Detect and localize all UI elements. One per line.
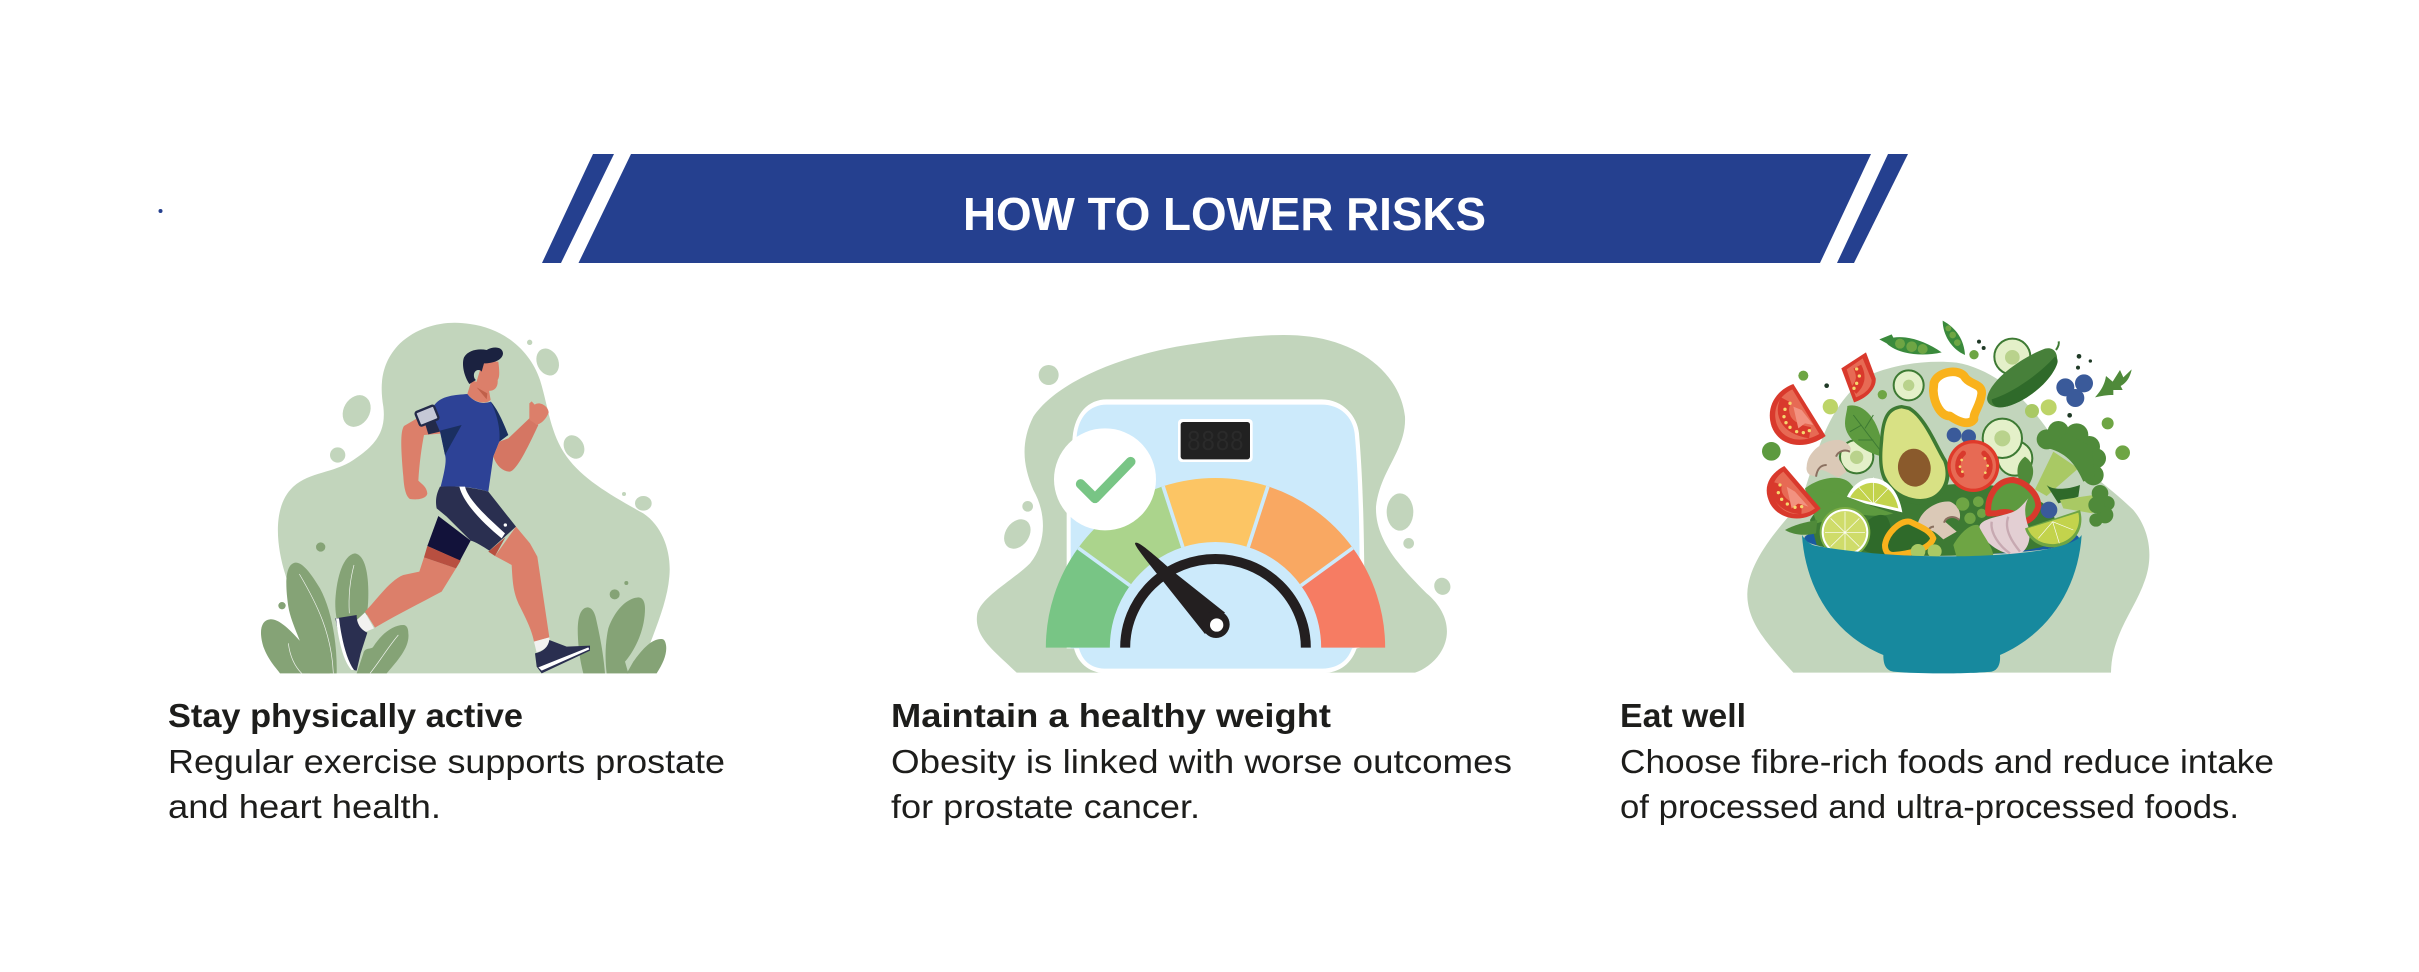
pea pods — [1879, 321, 1965, 355]
text block: stay physically active: and heart health. — [168, 788, 441, 825]
dark leaf — [1855, 515, 1891, 557]
cucumber slices — [1894, 370, 2022, 458]
scale body — [1071, 405, 1360, 669]
left plant — [261, 542, 408, 673]
front cuff — [488, 537, 505, 556]
text block: maintain a healthy weight: Maintain a healthy weight — [891, 697, 1331, 734]
lime half top — [1846, 477, 1902, 512]
gauge segments — [1046, 478, 1385, 648]
shorts — [436, 486, 516, 551]
text block: maintain a healthy weight: Obesity is linked with worse outcomes — [891, 743, 1512, 780]
back lettuce — [1785, 478, 1870, 535]
phone — [415, 405, 439, 426]
face — [476, 362, 499, 391]
fist — [529, 401, 549, 425]
red pepper ring — [1988, 480, 2038, 522]
banner main band — [578, 154, 1871, 263]
floating bubbles — [330, 340, 652, 511]
shorts button — [504, 523, 507, 527]
lime circle left — [1820, 507, 1870, 558]
herb leaf — [1845, 405, 1883, 457]
floating bubbles — [999, 365, 1453, 598]
runner figure — [335, 348, 590, 673]
pea cluster — [1956, 496, 1986, 524]
right plant — [578, 581, 666, 673]
display — [1178, 419, 1253, 462]
neck shadow — [477, 387, 487, 399]
lime half right — [2025, 510, 2081, 547]
salad base — [1810, 484, 2055, 556]
text block: eat well: Choose fibre-rich foods and reduce intake — [1620, 743, 2274, 780]
back shoe sole — [336, 618, 354, 670]
broccoli large — [2035, 421, 2115, 527]
display digits: 8888 — [1187, 426, 1244, 459]
whole cucumber — [1987, 341, 2059, 407]
cucumber seeds — [1850, 350, 2020, 464]
blueberries — [1947, 374, 2093, 444]
mushrooms — [1806, 440, 1960, 539]
floating green dots — [1762, 350, 2130, 461]
tomato slice — [1947, 440, 1999, 492]
front shoe — [535, 640, 590, 673]
armband — [425, 420, 440, 434]
green background blob — [977, 335, 1447, 673]
green background blob — [278, 323, 670, 673]
front shoe sole — [538, 647, 589, 671]
tomato wedges — [1767, 352, 1876, 518]
text block: maintain a healthy weight — [891, 697, 1512, 825]
yellow pepper ring — [1933, 372, 1982, 423]
bowl — [1802, 535, 2082, 673]
banner right stripe — [1837, 154, 1908, 263]
blueberry low — [2041, 502, 2057, 518]
scale body outline — [1067, 399, 1365, 673]
parsley — [2095, 369, 2132, 397]
illustration: runner — [261, 323, 670, 673]
front arm — [493, 418, 538, 472]
back cuff — [424, 546, 461, 568]
black specks — [1824, 340, 2092, 418]
text block: stay physically active: Regular exercise supports prostate — [168, 743, 725, 780]
cucumber slices back — [1840, 339, 2032, 476]
title: HOW TO LOWER RISKS — [963, 188, 1486, 240]
long leaf — [1813, 488, 1893, 516]
gauge inner arc — [1125, 559, 1306, 648]
text block: eat well: of processed and ultra-processed foods. — [1620, 788, 2239, 825]
low leaf — [1953, 525, 1993, 557]
avocado — [1879, 405, 1950, 505]
left plant veins — [288, 565, 398, 673]
socks — [355, 612, 550, 653]
front leg — [495, 527, 549, 642]
text block: eat well: Eat well — [1620, 697, 1746, 734]
neck — [467, 380, 491, 402]
back arm — [401, 417, 443, 499]
text block: maintain a healthy weight: for prostate cancer. — [891, 788, 1200, 825]
bowl interior — [1804, 522, 2079, 555]
green peas — [1911, 544, 1942, 559]
illustration: weight scale gauge — [977, 335, 1453, 673]
hair — [463, 348, 503, 384]
green background blob — [1747, 362, 2149, 673]
text block: eat well — [1620, 697, 2274, 825]
title banner — [542, 154, 1908, 263]
stray dot — [158, 209, 162, 213]
garlic — [1979, 498, 2030, 555]
yellow pepper small — [1885, 522, 1933, 555]
banner left stripe — [542, 154, 614, 263]
back leg — [365, 557, 456, 628]
shoulder shade — [491, 402, 508, 442]
illustration: salad bowl — [1747, 321, 2149, 673]
back shorts — [427, 516, 471, 561]
shorts stripe — [459, 487, 505, 538]
text block: stay physically active: Stay physically active — [168, 697, 523, 734]
spinach leaf — [2017, 457, 2033, 490]
shirt — [427, 394, 508, 492]
text block: stay physically active — [168, 697, 725, 825]
check badge — [1054, 428, 1156, 530]
underarm shade — [440, 425, 462, 455]
needle — [1135, 543, 1230, 638]
back shoe — [335, 615, 367, 671]
